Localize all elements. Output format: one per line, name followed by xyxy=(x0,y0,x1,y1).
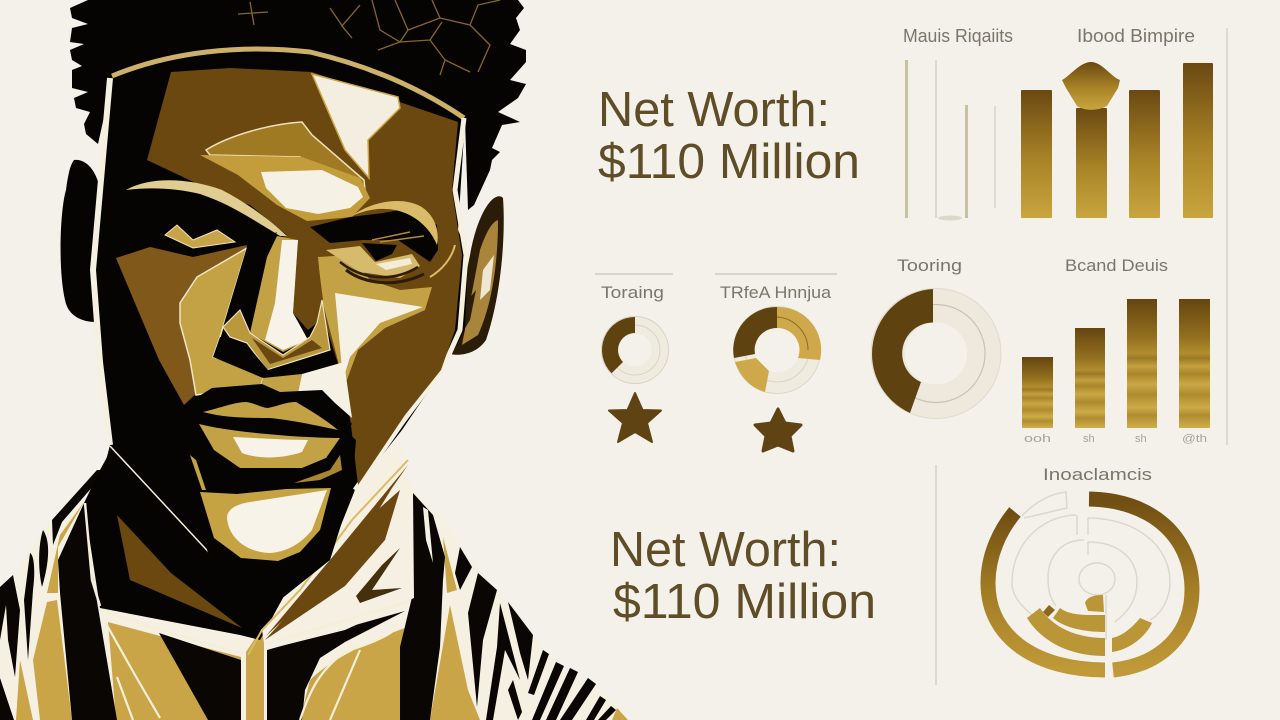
rule xyxy=(715,273,837,275)
icon: shirt black panels xyxy=(58,493,445,720)
empty bar outlines xyxy=(905,60,996,220)
icon: cape slit xyxy=(423,507,433,563)
radial chart: investments xyxy=(988,465,1192,670)
icon: nostril shadow xyxy=(213,337,330,378)
heading: net worth top: $110 Million xyxy=(598,135,860,189)
icon: lower lip xyxy=(199,424,340,468)
icon: neck brown patch xyxy=(117,515,242,628)
icon: upper lip xyxy=(203,402,338,430)
donut chart xyxy=(602,316,668,384)
icon: shirt and cape base xyxy=(0,470,628,720)
icon: under nose philtrum xyxy=(261,374,302,408)
icon: forehead cream patch xyxy=(312,74,400,178)
label: music rights: Mauis Riqaiits xyxy=(903,26,1013,46)
icon: right eye xyxy=(326,243,424,283)
heading: net worth top xyxy=(598,83,860,189)
icon: forehead sweep xyxy=(206,122,366,200)
icon: face base xyxy=(92,49,468,630)
icon: cape gold right xyxy=(430,537,628,720)
icon: chin xyxy=(200,488,331,561)
icon: right cheek gold xyxy=(318,255,432,420)
icon: face contour line xyxy=(93,78,110,445)
label: Toraing xyxy=(601,283,664,302)
divider: lower vertical xyxy=(935,465,937,685)
icon: nose dark bridge xyxy=(223,232,277,327)
outer ring right xyxy=(1089,499,1192,670)
axis labels: ooh xyxy=(1024,433,1051,445)
icon: chin gold stroke xyxy=(294,455,342,483)
donut chart xyxy=(871,288,1001,418)
icon: cape stripes left xyxy=(0,470,107,720)
bars xyxy=(1021,63,1213,218)
icon: lower lip highlight xyxy=(233,437,308,457)
bar chart: brand deals xyxy=(1022,256,1210,445)
icon: collar black xyxy=(84,448,320,640)
icon: right brow xyxy=(310,201,455,277)
bar chart: music rights xyxy=(903,26,1013,220)
icon: left ear xyxy=(61,160,100,322)
label: brand empire: Ibood Bimpire xyxy=(1077,26,1195,46)
thin rings xyxy=(1012,492,1170,640)
panel: touring small donut xyxy=(595,273,673,384)
bar chart: brand empire xyxy=(1021,26,1213,218)
icon: star two xyxy=(755,409,801,451)
icon: right cheek cream xyxy=(335,293,423,380)
icon: chin surround xyxy=(184,430,356,600)
icon: right ear xyxy=(450,196,504,355)
axis labels xyxy=(1024,433,1207,445)
panel: tour revenue donut xyxy=(715,273,837,394)
icon: shirt gold panels xyxy=(16,502,410,720)
icon: brow gold xyxy=(200,155,370,221)
icon: forehead gold outline xyxy=(112,49,464,118)
icon: left cheek brown xyxy=(116,245,247,405)
icon: forehead and cheek brown xyxy=(147,68,462,485)
heading: net worth bottom: Net Worth: xyxy=(610,523,841,577)
icon: nose gold xyxy=(250,236,308,352)
small dark segment xyxy=(1043,605,1055,617)
axis labels: @th xyxy=(1182,433,1207,445)
heading: net worth top: Net Worth: xyxy=(598,83,830,137)
rule xyxy=(595,273,673,275)
icon: cape stripes right xyxy=(455,547,616,720)
icon: moustache xyxy=(180,384,352,445)
axis labels: sh xyxy=(1083,433,1095,445)
icon: left cheek gold xyxy=(180,248,265,395)
heading: net worth bottom: $110 Million xyxy=(613,575,876,629)
icon: left brow dark xyxy=(103,188,287,258)
second ring xyxy=(1027,608,1152,656)
axis labels: sh xyxy=(1135,433,1147,445)
icon: hair xyxy=(70,0,526,210)
donut chart xyxy=(733,306,821,394)
outer ring left xyxy=(988,512,1105,670)
icon: left brow highlight xyxy=(126,180,287,236)
label: Tooring xyxy=(897,256,962,275)
icon: chin highlight xyxy=(227,490,327,553)
third ring xyxy=(1053,608,1105,632)
icon: shirt fine lines xyxy=(104,620,392,720)
icon: under nose cream xyxy=(296,362,352,418)
icon: nose underside brown xyxy=(252,338,322,364)
icon: nose highlight xyxy=(265,240,308,350)
panel: touring large donut xyxy=(871,256,1001,418)
icon: star one xyxy=(609,393,661,442)
icon: mouth line xyxy=(198,419,340,438)
icon: nose bridge brown xyxy=(293,240,323,330)
icon: face right contour xyxy=(355,118,466,490)
icon: left eye xyxy=(165,225,235,248)
icon: nose wing xyxy=(223,300,330,370)
centre segment xyxy=(1085,595,1104,612)
icon: forehead cream centre xyxy=(261,170,363,214)
divider: right vertical xyxy=(1226,28,1228,445)
icon: figure head on bar xyxy=(1062,62,1120,110)
heading: net worth bottom xyxy=(610,523,876,629)
label: TRfeA Hnnjua xyxy=(720,283,832,302)
bars xyxy=(1022,299,1210,428)
icon: collar lines xyxy=(85,446,410,654)
icon: goatee highlight xyxy=(190,455,206,490)
label: Inoaclamcis xyxy=(1043,465,1152,484)
icon: neck right panels xyxy=(248,440,414,655)
portrait illustration xyxy=(0,0,628,720)
label: Bcand Deuis xyxy=(1065,256,1168,275)
